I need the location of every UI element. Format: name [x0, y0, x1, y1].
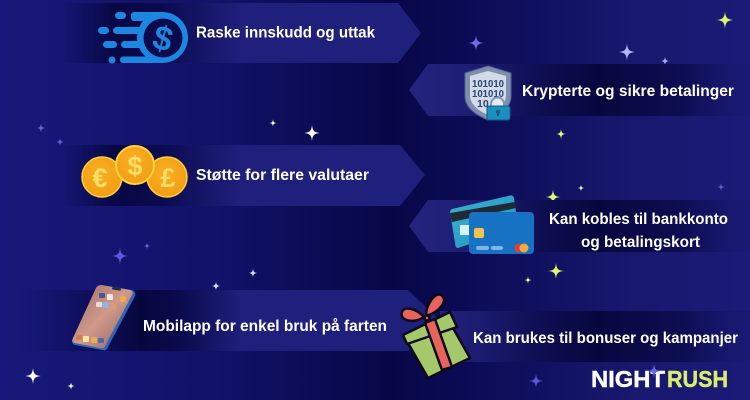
label: bank and cards line 1: Kan kobles til bankkonto [549, 211, 728, 228]
panel: bonuses and campaigns [402, 295, 750, 378]
icon: shield with lock: 101010 [472, 88, 504, 100]
icon: shield with lock: 10 [477, 98, 489, 110]
logo: NightRush: NIGHT [591, 366, 666, 392]
icon: gold coins: € [92, 163, 108, 193]
logo: NightRush: RUSH [667, 366, 728, 392]
label: bonuses and campaigns: Kan brukes til bonuser og kampanjer [473, 330, 738, 347]
label: bank and cards line 2: og betalingskort [581, 234, 700, 251]
panel: bank and cards [409, 195, 750, 254]
icon: smartphone [72, 285, 135, 350]
icon: shield with lock: 101010 [472, 78, 504, 90]
icon: payment cards [450, 195, 534, 254]
label: mobile app: Mobilapp for enkel bruk på farten [143, 318, 387, 335]
label: encrypted payments: Krypterte og sikre betalinger [522, 83, 734, 100]
label: fast deposits: Raske innskudd og uttak [196, 24, 375, 42]
icon: fast dollar coin: $ [149, 18, 177, 60]
icon: gift box [402, 295, 470, 378]
icon: shield with lock [465, 66, 511, 120]
panel: encrypted payments [409, 64, 750, 120]
panel: fast deposits [60, 3, 421, 64]
logo: NightRush [591, 366, 728, 392]
icon: gold coins [82, 146, 187, 197]
icon: gold coins: $ [127, 151, 143, 181]
sparkle over logo [647, 364, 661, 378]
panel: mobile app [20, 285, 440, 351]
icon: gold coins: £ [160, 163, 176, 193]
panel: multiple currencies [60, 145, 425, 206]
icon: fast dollar coin [98, 12, 188, 64]
label: multiple currencies: Støtte for flere valutaer [196, 167, 369, 184]
